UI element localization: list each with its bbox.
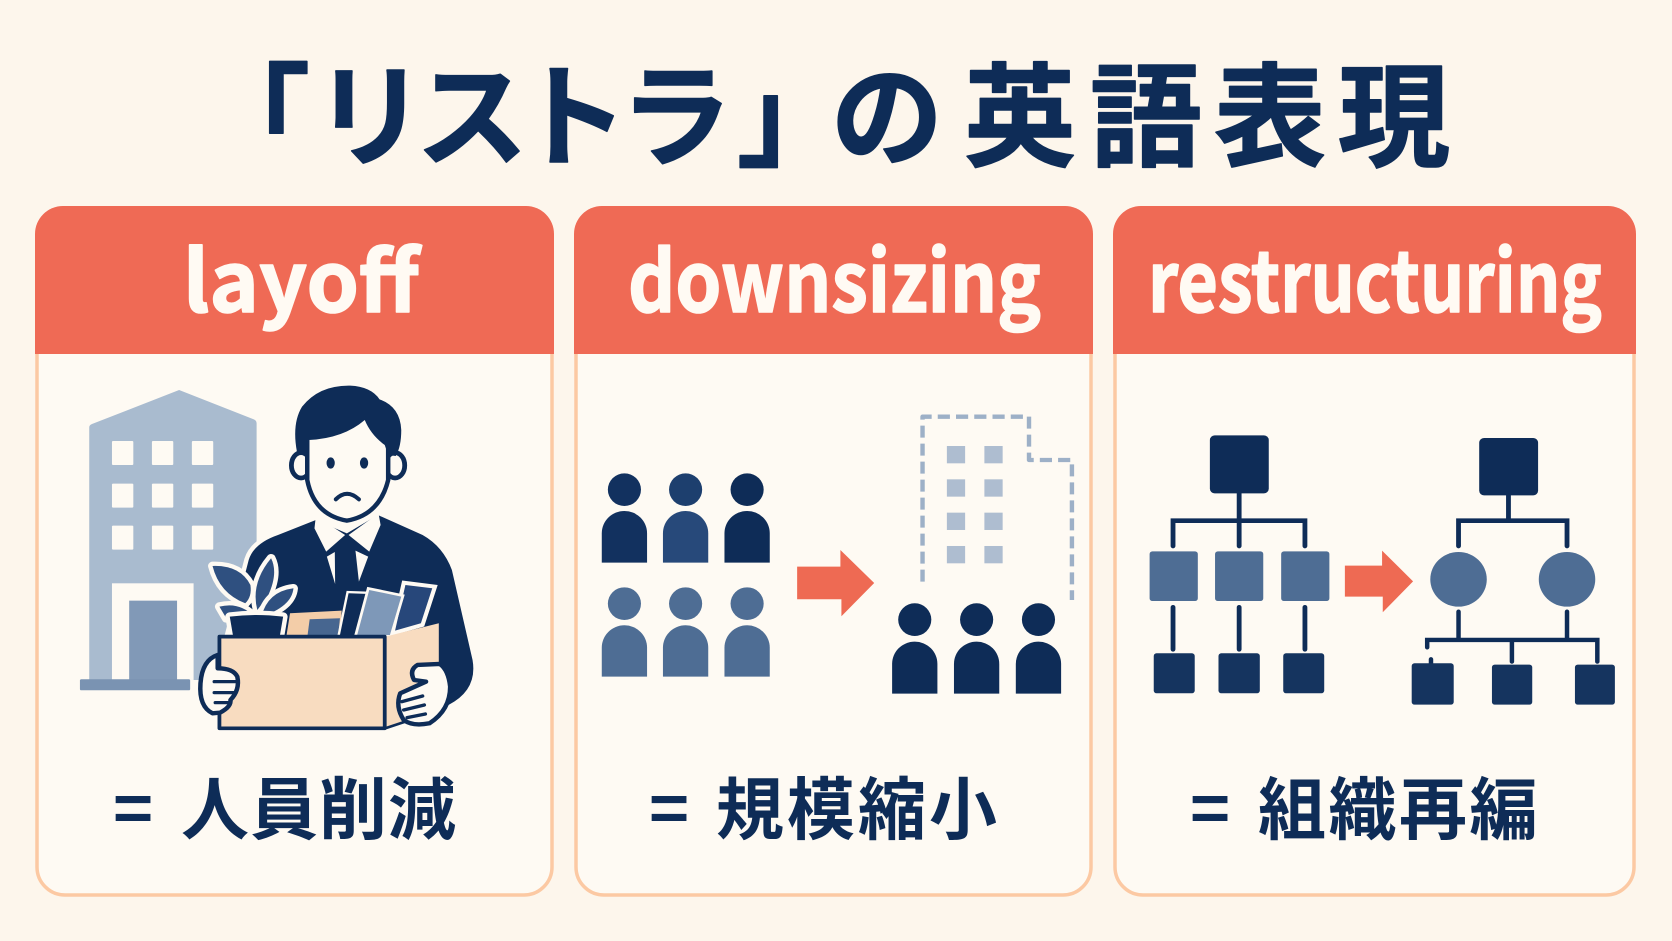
translation: 規模縮小: = — [649, 755, 689, 854]
arrow — [797, 550, 874, 616]
translation: 人員削減: = — [113, 755, 153, 854]
people: before, top row — [602, 473, 770, 563]
header band — [574, 206, 1093, 354]
translation: 組織再編: 組織再編 — [1258, 755, 1540, 854]
people: before, bottom row — [602, 587, 770, 677]
icon: plant — [213, 558, 293, 637]
icon: office building — [80, 390, 257, 690]
illustration: laid-off employee with box — [80, 386, 473, 728]
arrow — [1345, 551, 1413, 612]
illustration: org chart restructure — [1150, 435, 1615, 705]
header band — [1113, 206, 1636, 354]
panel: layoff — [35, 206, 554, 895]
heading: layoff: layoff — [183, 216, 423, 337]
panel body — [576, 208, 1091, 895]
icon: dashed building outline — [923, 417, 1072, 600]
panel: restructuring — [1113, 206, 1636, 895]
translation: 規模縮小: 規模縮小 — [716, 755, 1000, 854]
title: 「リストラ」の英語表現 — [198, 28, 1450, 190]
people: after — [892, 603, 1061, 694]
panel: downsizing — [574, 206, 1093, 895]
org chart: before — [1150, 435, 1329, 693]
translation: 組織再編: = — [1190, 755, 1230, 854]
icon: right hand — [398, 664, 450, 724]
icon: left hand — [200, 655, 238, 713]
org chart: after — [1412, 438, 1615, 705]
header band — [35, 206, 554, 354]
illustration: workforce shrinking — [602, 417, 1072, 694]
translation: 人員削減: 人員削減 — [181, 755, 457, 854]
heading: downsizing: downsizing — [628, 216, 1041, 337]
icon: man — [223, 386, 473, 707]
panel body — [1115, 208, 1634, 895]
panel body — [37, 208, 552, 895]
icon: cardboard box — [219, 623, 439, 728]
icon: box contents — [287, 585, 432, 635]
